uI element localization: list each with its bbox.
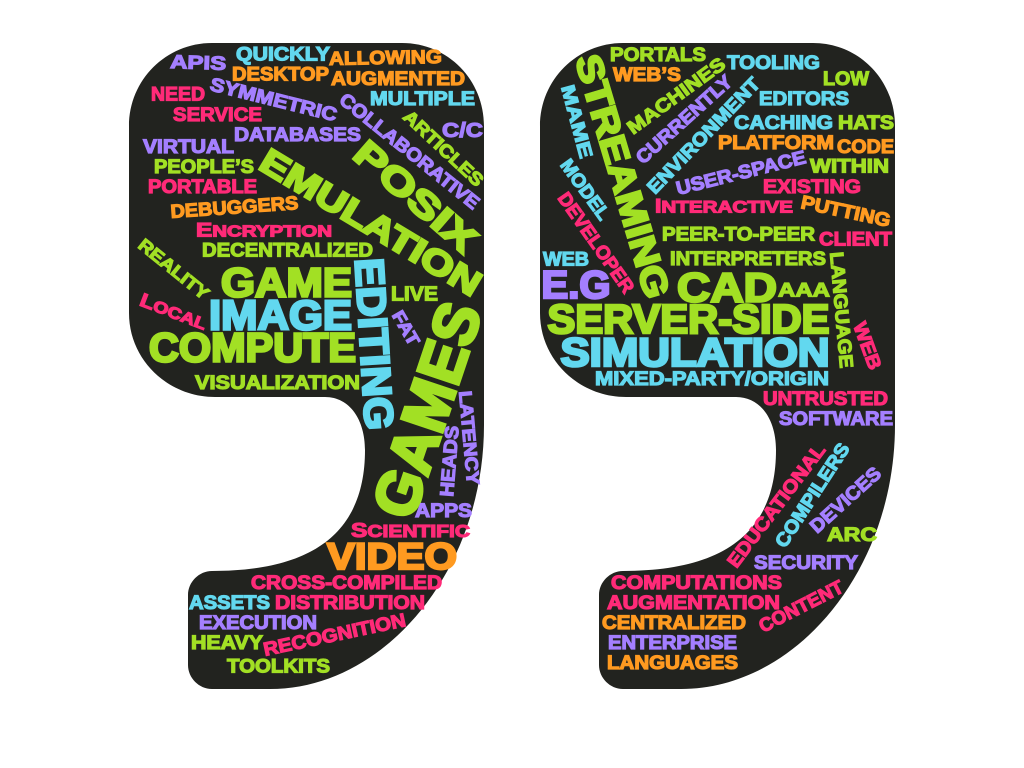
word: WITHIN: WITHIN	[810, 156, 889, 178]
word: EDUCATIONAL: EDUCATIONAL	[724, 440, 830, 572]
word: SYMMETRIC: SYMMETRIC	[208, 74, 339, 126]
word: POSIX: POSIX	[346, 132, 486, 261]
word: REALITY: REALITY	[134, 235, 213, 304]
word: E.G: E.G	[542, 264, 610, 307]
word: GAMES: GAMES	[360, 294, 496, 526]
word: TOOLKITS: TOOLKITS	[227, 656, 330, 678]
word: EDITING: EDITING	[346, 257, 402, 431]
word: PORTABLE: PORTABLE	[148, 177, 257, 198]
word: CURRENTLY: CURRENTLY	[632, 71, 737, 169]
word: LIVE: LIVE	[391, 284, 438, 306]
word: DEVELOPER: DEVELOPER	[553, 189, 638, 298]
word: COLLABORATIVE: COLLABORATIVE	[335, 90, 483, 214]
word: AUGMENTED: AUGMENTED	[331, 69, 465, 90]
word: INTERPRETERS: INTERPRETERS	[670, 249, 826, 270]
word: LOW: LOW	[823, 69, 869, 90]
word: SERVICE: SERVICE	[173, 105, 262, 126]
word: PORTALS: PORTALS	[610, 45, 706, 66]
word: AUGMENTATION: AUGMENTATION	[607, 593, 780, 614]
word: GAME: GAME	[221, 260, 352, 306]
word: WEB (pink): WEB	[848, 320, 885, 373]
word: STREAMING: STREAMING	[567, 50, 678, 303]
word: WEB'S: WEB’S	[613, 65, 681, 86]
word: VIDEO: VIDEO	[327, 535, 457, 577]
word: RECOGNITION: RECOGNITION	[262, 610, 408, 661]
word: SECURITY: SECURITY	[754, 553, 858, 574]
word: EXECUTION: EXECUTION	[199, 613, 317, 634]
word: COMPILERS: COMPILERS	[772, 440, 855, 552]
word: LANGUAGE: LANGUAGE	[825, 251, 856, 369]
word: ALLOWING: ALLOWING	[329, 47, 442, 70]
word: DESKTOP: DESKTOP	[232, 64, 329, 86]
word: VISUALIZATION: VISUALIZATION	[195, 373, 360, 394]
word: MULTIPLE: MULTIPLE	[370, 89, 475, 110]
word: CLIENT: CLIENT	[819, 230, 892, 250]
word: EDITORS: EDITORS	[759, 89, 849, 110]
word: CENTRALIZED: CENTRALIZED	[602, 613, 746, 634]
word: ENTERPRISE: ENTERPRISE	[608, 633, 737, 654]
word: SOFTWARE: SOFTWARE	[779, 409, 893, 430]
word: HATS: HATS	[838, 113, 894, 134]
word: WEB (blue): WEB	[543, 250, 589, 270]
word: COMPUTE: COMPUTE	[149, 324, 356, 370]
word: MAME: MAME	[556, 83, 596, 161]
word: AAA: AAA	[778, 280, 830, 302]
word: LATENCY: LATENCY	[455, 390, 483, 485]
word: PEOPLE'S: PEOPLE’S	[154, 157, 254, 178]
word: SCIENTIFIC: SCIENTIFIC	[351, 519, 470, 542]
word: HEAVY: HEAVY	[191, 633, 263, 654]
word: SIMULATION: SIMULATION	[560, 331, 830, 375]
word: LANGUAGES: LANGUAGES	[607, 653, 738, 674]
word: DEVICES: DEVICES	[806, 463, 886, 538]
word: TOOLING: TOOLING	[727, 53, 820, 74]
word: QUICKLY: QUICKLY	[236, 44, 330, 66]
word: ASSETS: ASSETS	[189, 593, 270, 614]
word: MACHINES: MACHINES	[624, 54, 730, 139]
word: MODEL: MODEL	[555, 156, 614, 225]
word: COMPUTATIONS: COMPUTATIONS	[611, 573, 782, 594]
word: SERVER-SIDE: SERVER-SIDE	[548, 296, 830, 342]
left quote shape	[129, 43, 484, 689]
word: FAT: FAT	[388, 307, 424, 349]
word: APPS: APPS	[415, 501, 472, 522]
word: DISTRIBUTION: DISTRIBUTION	[275, 593, 425, 614]
word: UNTRUSTED: UNTRUSTED	[763, 389, 888, 410]
word: CACHING: CACHING	[734, 113, 833, 134]
panel: right quotation mark	[540, 43, 895, 689]
right quote shape	[540, 43, 895, 689]
word: ENVIRONMENT: ENVIRONMENT	[643, 74, 765, 198]
word: PLATFORM: PLATFORM	[718, 133, 834, 154]
word: EMULATION: EMULATION	[253, 141, 488, 304]
word: PEER-TO-PEER: PEER-TO-PEER	[662, 224, 815, 246]
word: MIXED-PARTY/ORIGIN: MIXED-PARTY/ORIGIN	[595, 369, 829, 390]
word: DEBUGGERS: DEBUGGERS	[170, 193, 299, 223]
word: DECENTRALIZED: DECENTRALIZED	[202, 240, 373, 262]
word: HEADS: HEADS	[437, 425, 464, 497]
word: DATABASES: DATABASES	[234, 125, 361, 146]
panel: left quotation mark	[129, 43, 496, 689]
word: IMAGE: IMAGE	[209, 292, 352, 338]
word: LOCAL: LOCAL	[137, 290, 210, 335]
word: C/C: C/C	[442, 119, 483, 142]
word: ENCRYPTION: ENCRYPTION	[196, 220, 332, 242]
word: CONTENT: CONTENT	[756, 577, 848, 637]
word: NEED: NEED	[151, 84, 205, 106]
word: USER-SPACE: USER-SPACE	[674, 147, 808, 200]
word: APIS: APIS	[170, 52, 227, 75]
word: EXISTING: EXISTING	[763, 177, 861, 198]
word: ARC: ARC	[827, 525, 877, 546]
word: VIRTUAL: VIRTUAL	[143, 137, 234, 158]
word: INTERACTIVE: INTERACTIVE	[655, 196, 793, 218]
word: PUTTING: PUTTING	[799, 192, 892, 232]
word: CROSS-COMPILED: CROSS-COMPILED	[251, 573, 442, 594]
word: CAD: CAD	[677, 264, 777, 310]
word: ARTICLES: ARTICLES	[399, 106, 488, 190]
word: CODE: CODE	[837, 137, 894, 158]
